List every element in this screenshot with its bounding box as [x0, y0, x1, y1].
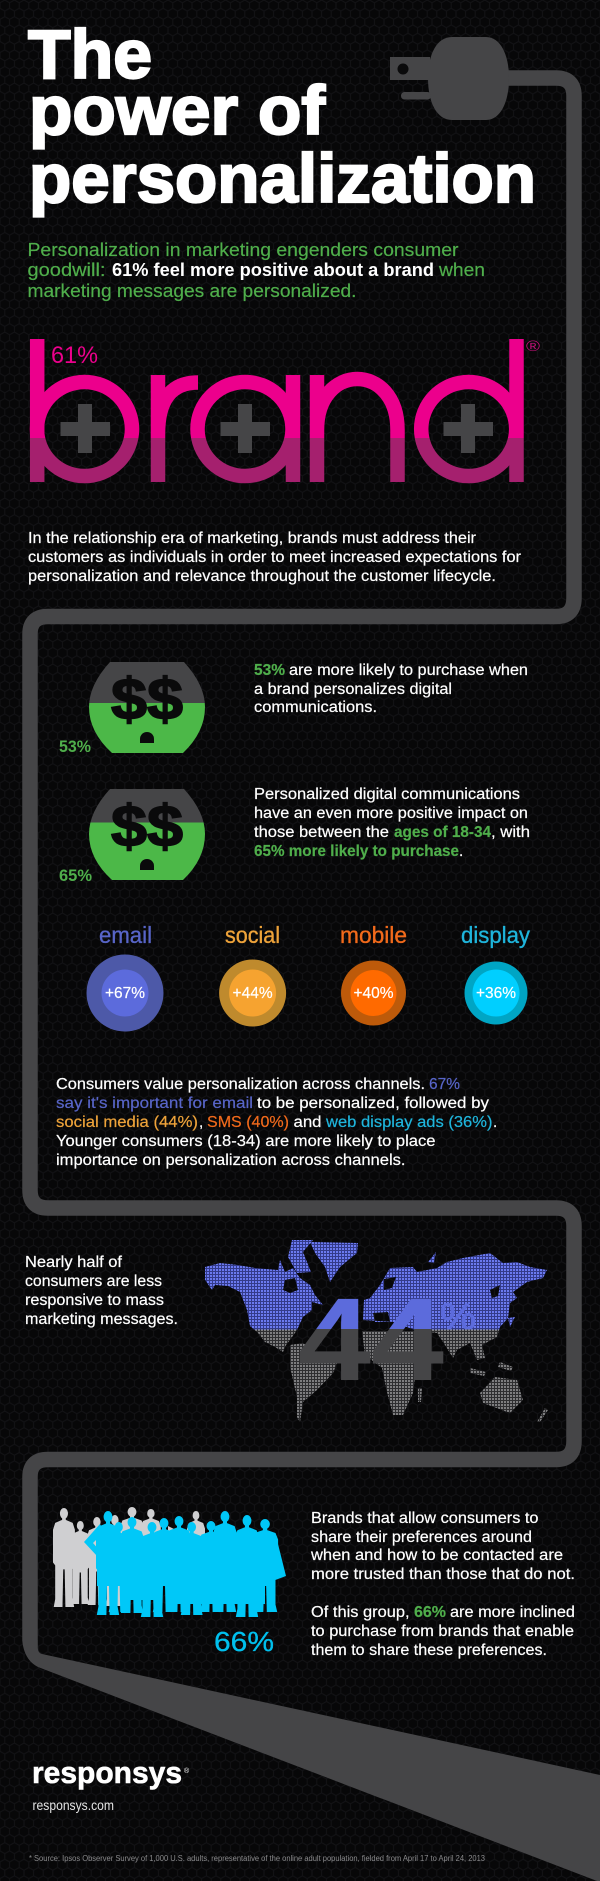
text: 53% more likely — [254, 662, 528, 716]
61% label: 61% — [51, 342, 98, 369]
channel: email: +67% — [105, 985, 145, 1002]
text: 53% more likely: a brand personalizes digital — [254, 681, 452, 698]
solid torso mass — [97, 1536, 273, 1586]
channel: display: +36% — [476, 985, 516, 1002]
text: brands that allow preferences: to purchase from brands that enable — [311, 1623, 574, 1640]
logo: responsys: responsys — [32, 1755, 182, 1790]
paragraph: channel values — [56, 1076, 497, 1169]
text: brands that allow preferences: Brands that allow consumers to — [311, 1510, 538, 1527]
plus sign: d — [444, 404, 493, 453]
paragraph: channel values: 67% — [429, 1076, 460, 1093]
text: brands that allow preferences: them to share these preferences. — [311, 1642, 547, 1659]
text: brands that allow preferences: share their preferences around — [311, 1529, 532, 1546]
intro text: goodwill statistic: marketing messages are personalized. — [28, 280, 356, 301]
link: responsys.com: responsys.com — [32, 1797, 114, 1813]
text: brands that allow preferences: when and how to be contacted are — [310, 1547, 563, 1564]
channel: mobile: mobile — [340, 922, 407, 948]
gray people — [53, 1507, 205, 1607]
channel: social: +44% — [233, 985, 273, 1002]
paragraph: channel values: to be personalized, followed by — [257, 1095, 489, 1112]
channel: email — [86, 922, 164, 1032]
paragraph: channel values: Consumers value personalization across channels. — [56, 1076, 425, 1093]
brand wordmark with 61% fill — [37, 338, 540, 482]
channel: mobile — [340, 922, 407, 1026]
plus sign: b — [60, 404, 110, 453]
text: brands that allow preferences: more trusted than those that do not. — [311, 1566, 575, 1583]
text: ages 18-34: those between the — [254, 824, 389, 841]
paragraph: channel values: importance on personalization across channels. — [56, 1152, 406, 1169]
text: brands that allow preferences: are more inclined — [450, 1604, 575, 1621]
icon: outlet face 53% — [89, 662, 205, 753]
text: brands that allow preferences: Of this group, — [311, 1604, 410, 1621]
icon: plug — [390, 37, 509, 120]
text: nearly half of consumers: responsive to mass — [25, 1292, 164, 1309]
paragraph: channel values: and — [294, 1114, 322, 1131]
paragraph: channel values: web display ads (36%) — [325, 1114, 492, 1131]
text: nearly half of consumers: consumers are less — [25, 1273, 162, 1290]
channel: mobile: +40% — [353, 985, 394, 1002]
icon: outlet face 65%: $$ — [111, 794, 183, 859]
title: power of — [29, 72, 326, 149]
paragraph: channel values: , — [199, 1114, 203, 1131]
intro text: goodwill statistic: 61% feel more positive about a brand — [112, 259, 434, 280]
text: ages 18-34: ages of 18-34 — [394, 824, 491, 841]
paragraph: relationship era: In the relationship era of marketing, brands must address their — [28, 530, 476, 547]
cord widening into a beam at the bottom — [22, 1640, 600, 1881]
registered mark: ® — [526, 338, 540, 355]
icon: outlet face 65% — [89, 789, 205, 880]
paragraph: channel values: Younger consumers (18-34) are more likely to place — [56, 1133, 435, 1150]
text: nearly half of consumers: Nearly half of — [25, 1254, 123, 1271]
intro text: goodwill statistic: Personalization in marketing engenders consumer — [28, 239, 458, 260]
cyan people — [84, 1511, 286, 1617]
text: brands that allow preferences: 66% — [414, 1604, 446, 1621]
paragraph: relationship era: personalization and relevance throughout the customer lifecycle. — [28, 568, 496, 585]
logo: responsys: ® — [184, 1767, 190, 1775]
title — [28, 16, 536, 217]
text: nearly half of consumers: marketing messages. — [25, 1311, 178, 1328]
text: nearly half of consumers — [25, 1254, 178, 1328]
text: ages 18-34 — [254, 786, 530, 860]
channel: display: display — [461, 922, 530, 948]
intro text: goodwill statistic: when — [438, 259, 485, 280]
text: ages 18-34: 65% more likely to purchase — [254, 843, 459, 860]
label: 65%: 65% — [59, 867, 92, 885]
text: 53% more likely: communications. — [254, 699, 377, 716]
dotted world map with 44% fill — [200, 1235, 552, 1426]
channel: social: social — [225, 922, 280, 948]
channel: social — [219, 922, 286, 1026]
text: ages 18-34: . — [459, 843, 463, 860]
paragraph: channel values: . — [493, 1114, 497, 1131]
channel: display — [461, 922, 530, 1024]
text: 53% more likely: 53% — [254, 662, 285, 679]
intro text: goodwill statistic: goodwill: — [28, 259, 106, 280]
paragraph: channel values: SMS (40%) — [207, 1114, 289, 1131]
label: 53%: 53% — [59, 738, 91, 756]
text: 53% more likely: are more likely to purchase when — [289, 662, 528, 679]
paragraph: relationship era — [28, 530, 521, 585]
paragraph: channel values: social media (44%) — [56, 1114, 198, 1131]
text: ages 18-34: Personalized digital communications — [254, 786, 520, 803]
percent sign: % — [440, 1296, 476, 1337]
crowd of silhouettes, 66% in cyan — [53, 1507, 286, 1617]
title: The — [28, 16, 152, 93]
label: 66%: 66% — [214, 1626, 274, 1657]
plus sign: a — [220, 404, 270, 453]
skirt on the right figure — [270, 1534, 286, 1582]
paragraph: channel values: say it's important for email — [56, 1095, 253, 1112]
title: personalization — [29, 140, 536, 217]
big number 44: 44 — [298, 1274, 444, 1406]
paragraph: relationship era: customers as individuals in order to meet increased expectations for — [28, 549, 521, 566]
text: brands that allow preferences — [310, 1510, 575, 1659]
channel: email: email — [99, 922, 152, 948]
text: ages 18-34: , with — [491, 824, 530, 841]
raised arm on the left figure — [84, 1524, 104, 1556]
text: ages 18-34: have an even more positive impact on — [254, 805, 528, 822]
source footnote: * Source: Ipsos Observer Survey of 1,000 U.S. adults, representative of the online adult population, fielded from April 17 to April 24, 2013 — [29, 1854, 486, 1863]
intro text: goodwill statistic — [28, 239, 485, 301]
icon: outlet face 53%: $$ — [111, 667, 183, 732]
